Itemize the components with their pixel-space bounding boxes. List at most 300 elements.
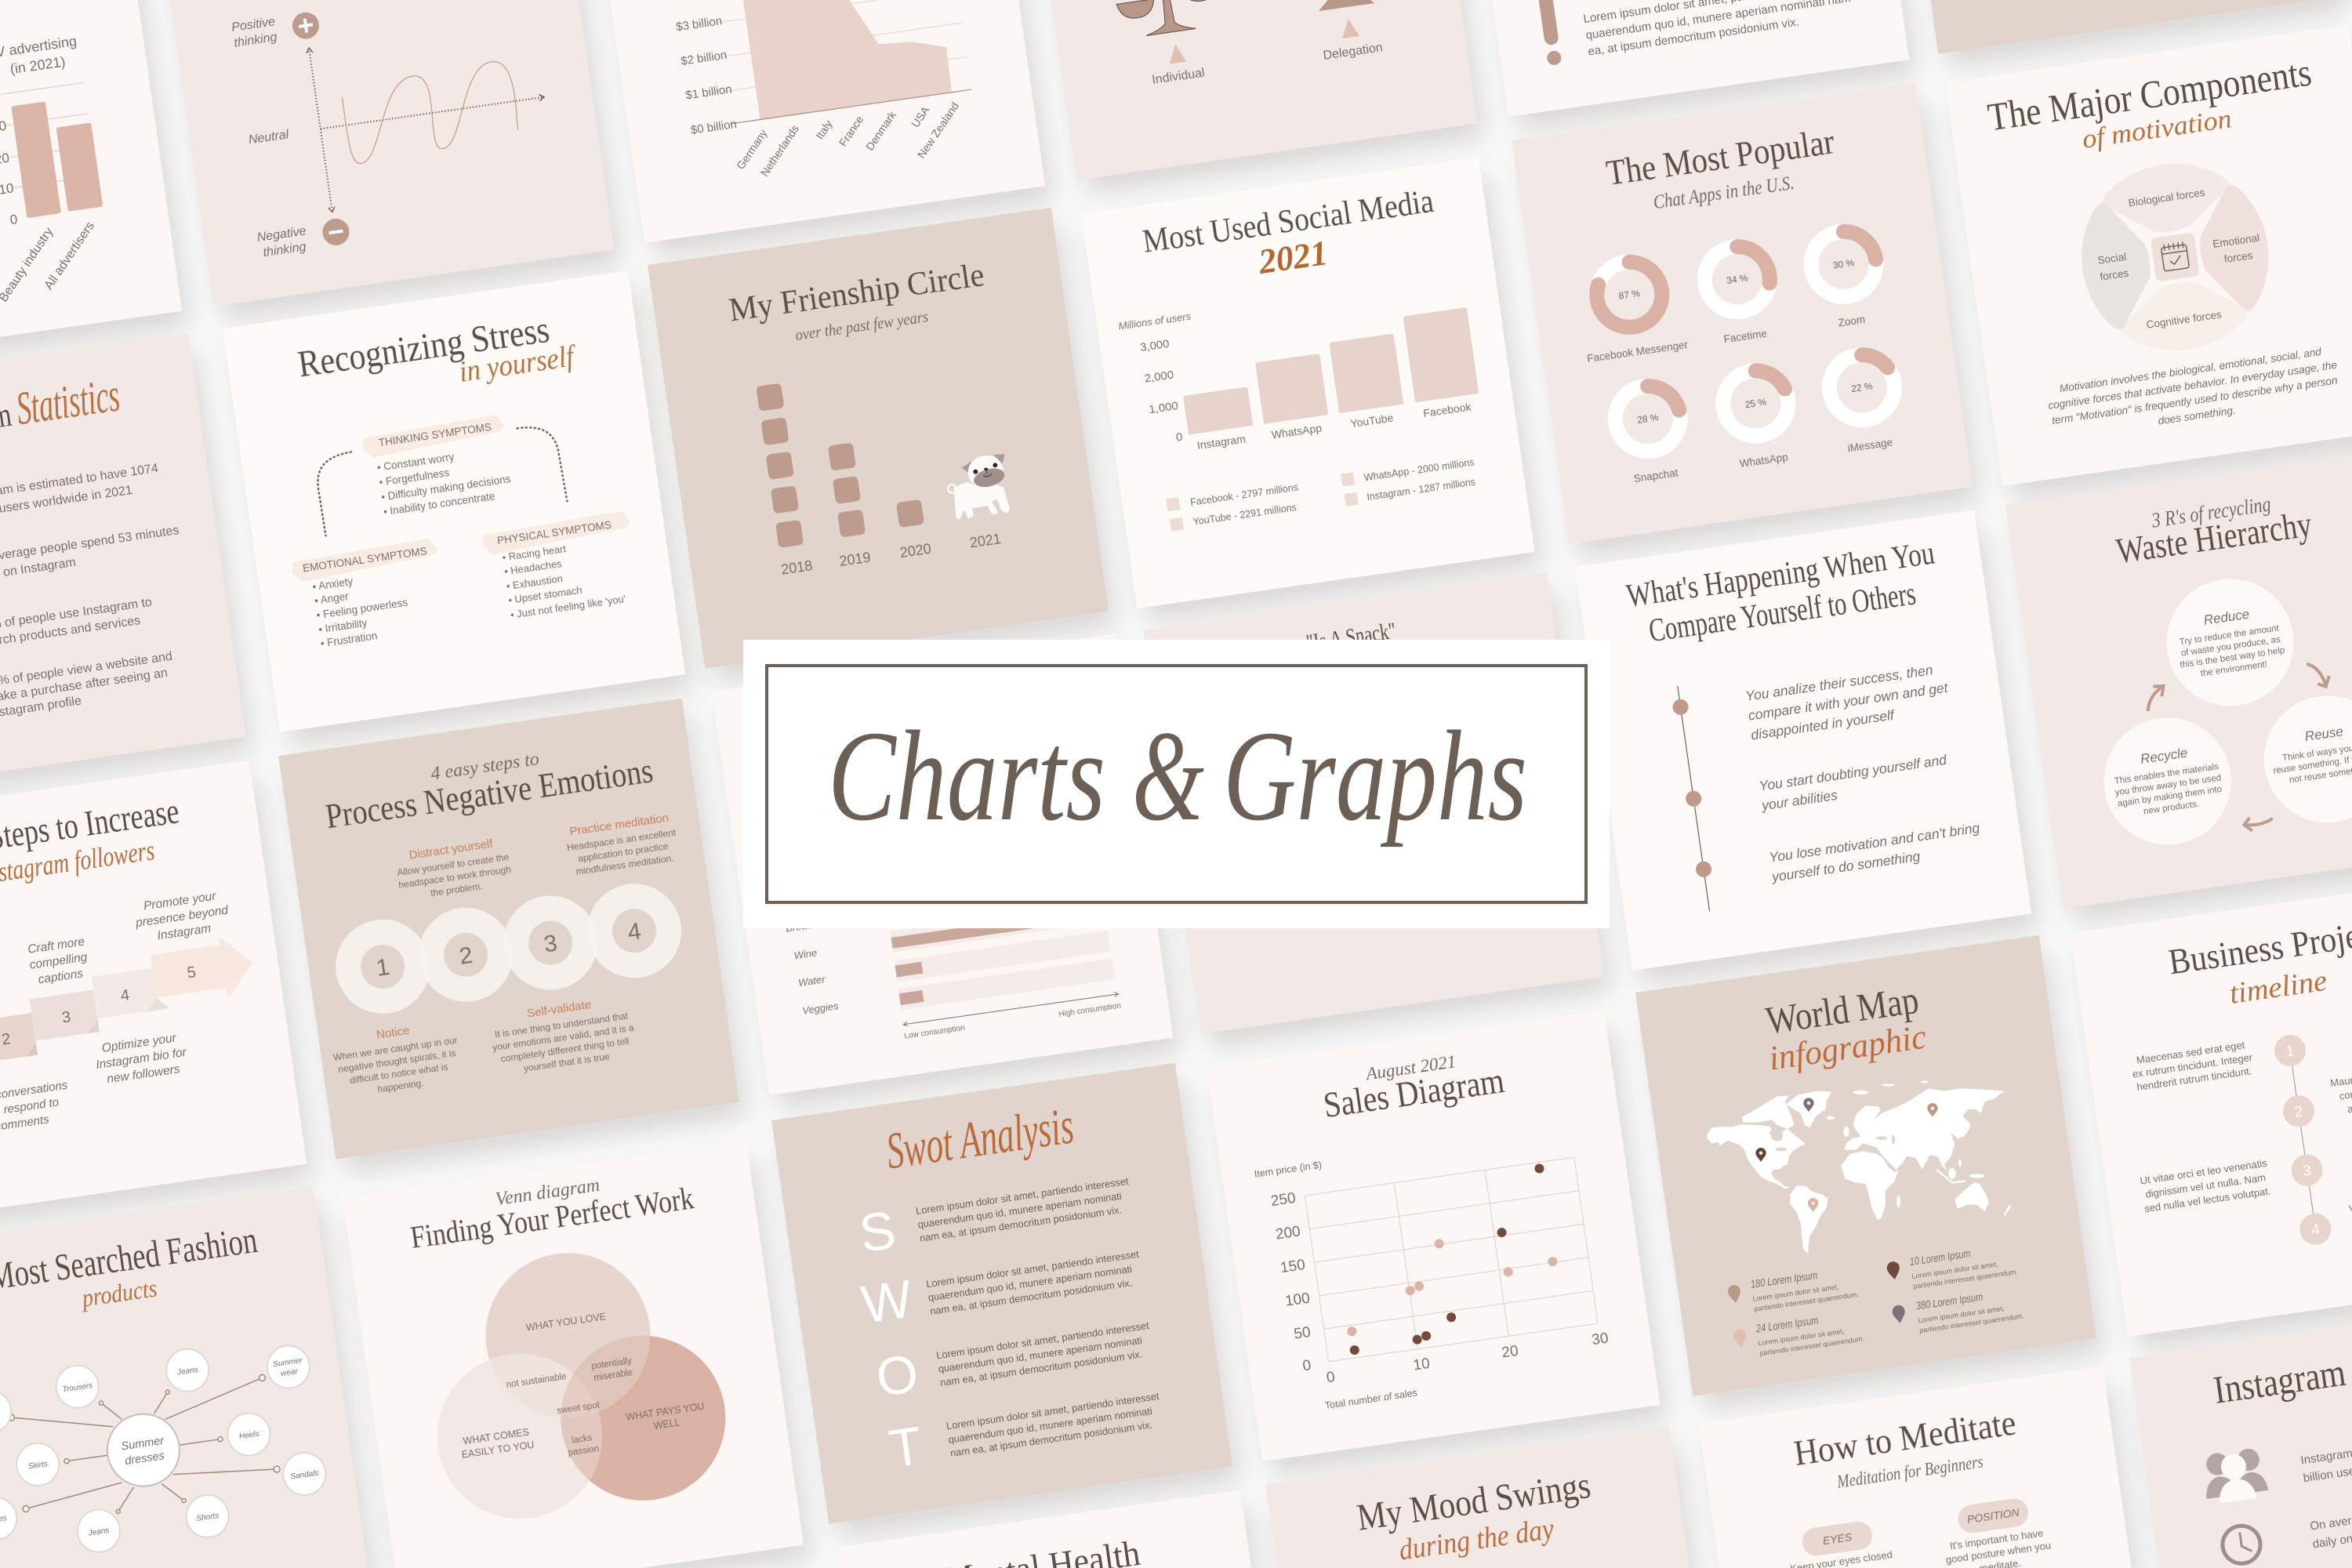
food labels: Water xyxy=(797,973,826,989)
legend: 180: 180 Lorem Ipsum xyxy=(1750,1269,1818,1290)
list: thinking symptoms: • Inability to concentrate xyxy=(383,490,495,517)
paragraph: weaknesses: Lorem ipsum dolor sit amet, partiendo interesset xyxy=(925,1248,1140,1290)
venn labels: WHAT YOU LOVE xyxy=(525,1311,607,1334)
circle: reduce xyxy=(2158,571,2302,714)
statement three: yourself to do something xyxy=(1770,848,1922,885)
y axis values: 200 xyxy=(1275,1223,1301,1243)
heading: Waste Hierarchy xyxy=(2114,504,2314,571)
map pins xyxy=(1755,1098,1938,1212)
step: self-validate: yourself that it is true xyxy=(523,1051,611,1074)
list: physical symptoms: • Just not feeling like 'you' xyxy=(510,593,626,621)
step: distract yourself: headspace to work through xyxy=(397,864,512,891)
text: position: good posture when you xyxy=(1945,1539,2052,1566)
x axis values: 20 xyxy=(1501,1343,1519,1361)
subheading: Venn diagram xyxy=(494,1175,601,1210)
step: self-validate xyxy=(488,993,638,1078)
list: thinking symptoms: • Forgetfulness xyxy=(379,466,450,488)
panel: most searched fashion xyxy=(0,1187,368,1568)
heading: Recognizing Stress xyxy=(296,309,552,386)
mind map satellites: Jeans xyxy=(176,1366,198,1377)
step: distract yourself xyxy=(394,835,514,903)
hub: summer dresses: Summer xyxy=(121,1435,165,1453)
chart label: TV advertising: (in 2021) xyxy=(9,53,67,77)
venn labels: not sustainable xyxy=(506,1372,567,1390)
circle: reuse: Reuse xyxy=(2304,724,2344,744)
label: neutral: Neutral xyxy=(248,128,290,147)
venn labels xyxy=(445,1299,709,1473)
panel: my mood swings xyxy=(1265,1427,1689,1568)
circle: recycle: new products. xyxy=(2143,800,2200,817)
paragraph: opportunities: quaerendum quo id, munere aperiam nominati xyxy=(938,1334,1143,1375)
mind map satellites: Skirts xyxy=(27,1460,49,1471)
icon: users xyxy=(2200,1446,2270,1505)
heading xyxy=(1624,535,1942,652)
panel: my friendship circle xyxy=(648,208,1109,669)
y axis values: 50 xyxy=(1293,1324,1312,1343)
donut: WhatsApp 25% xyxy=(1714,361,1801,471)
food labels: Bread xyxy=(785,919,814,935)
donut: Zoom 30% xyxy=(1802,223,1889,332)
donut: WhatsApp 25%: 25 % xyxy=(1744,397,1767,410)
legend: 24: Lorem ipsum dolor sit amet, xyxy=(1758,1327,1845,1347)
mind map satellites: wear xyxy=(280,1367,299,1378)
list: physical symptoms: • Headaches xyxy=(503,557,563,577)
paragraph: strengths: nam ea, at ipsum democritum posidonium vix. xyxy=(919,1203,1123,1244)
title: Charts xyxy=(828,704,1105,848)
paragraph: weaknesses: quaerendum quo id, munere aperiam nominati xyxy=(927,1263,1133,1304)
paragraph: does something. xyxy=(2158,405,2237,426)
title: & xyxy=(1132,704,1204,848)
x axis labels: New Zealand xyxy=(915,100,961,161)
paragraph: cognitive forces that activate behavior. In everyday usage, the xyxy=(2047,359,2338,412)
pie of forces: forces xyxy=(2099,267,2129,283)
step: practice meditation xyxy=(564,811,681,878)
heading: How to Meditate xyxy=(1791,1402,2018,1473)
heading: The Major Components xyxy=(1985,49,2314,139)
step text: promote: presence beyond xyxy=(134,903,230,930)
paragraph: threats: Lorem ipsum dolor sit amet, partiendo interesset xyxy=(946,1390,1160,1432)
x axis labels: Netherlands xyxy=(758,122,801,179)
legend: 380: Lorem ipsum dolor sit amet, xyxy=(1918,1305,2005,1324)
x axis labels: Italy xyxy=(813,118,835,141)
legend: 10: partiendo interesset quaerendum. xyxy=(1913,1268,2018,1290)
donut: Snapchat 28%: Snapchat xyxy=(1633,466,1679,485)
legend: 10 xyxy=(1886,1240,2018,1294)
hub: summer dresses xyxy=(103,1410,184,1491)
subheading: Chat Apps in the U.S. xyxy=(1652,172,1795,213)
x axis labels: Instagram xyxy=(1196,432,1247,452)
pie of forces: Biological forces xyxy=(2128,187,2206,209)
timeline: 2 xyxy=(2293,1104,2304,1121)
subheading: over the past few years xyxy=(794,307,929,344)
title: Graphs xyxy=(1223,704,1527,848)
panel: exclamation text card xyxy=(1451,0,1909,117)
icon: delegation base xyxy=(1314,0,1374,11)
mind map connectors xyxy=(7,1374,283,1527)
paragraph: opportunities: nam ea, at ipsum democritum posidonium vix. xyxy=(939,1348,1143,1388)
y axis labels: $1 billion xyxy=(685,82,733,102)
paragraph: weaknesses: nam ea, at ipsum democritum posidonium vix. xyxy=(929,1276,1133,1317)
paragraph: Motivation involves the biological, emotional, social, and xyxy=(2059,346,2322,394)
subheading: August 2021 xyxy=(1363,1051,1457,1084)
arrow steps: 3 xyxy=(61,1008,72,1027)
pill: position: POSITION xyxy=(1966,1506,2020,1526)
step: practice meditation: mindfulness meditation. xyxy=(575,852,674,877)
mind map satellites: Sandals xyxy=(290,1469,319,1481)
label: emotional symptoms: EMOTIONAL SYMPTOMS xyxy=(302,545,428,575)
list: physical symptoms: • Racing heart xyxy=(502,543,567,564)
panel: world map infographic xyxy=(1635,935,2096,1396)
icon: clock xyxy=(2220,1523,2263,1566)
label: delegation: Delegation xyxy=(1323,41,1384,63)
pie of forces: forces xyxy=(2223,249,2254,265)
venn labels: WHAT COMES xyxy=(463,1427,530,1446)
axis title: Millions of users xyxy=(1118,310,1192,332)
label: thinking symptoms: THINKING SYMPTOMS xyxy=(378,421,492,448)
circle: reduce: the environment! xyxy=(2200,660,2268,679)
bar chart xyxy=(1176,307,1479,435)
subheading: Meditation for Beginners xyxy=(1835,1452,1984,1492)
step circles: 2 xyxy=(458,942,474,970)
script year: 2021 xyxy=(1255,233,1330,281)
y axis values: 0 xyxy=(1301,1357,1312,1374)
legend: 24 xyxy=(1732,1308,1864,1360)
heading: Process Negative Emotions xyxy=(323,751,655,836)
timeline: 1 xyxy=(2285,1043,2296,1061)
x axis values: 10 xyxy=(1412,1356,1431,1374)
list: physical symptoms: • Upset stomach xyxy=(507,584,583,606)
thinking wave xyxy=(340,59,521,165)
donut: iMessage 22% xyxy=(1820,346,1907,456)
mind map satellites: Trousers xyxy=(62,1381,93,1394)
circle: recycle: you throw away to be used xyxy=(2114,773,2222,797)
bar: all advertisers xyxy=(56,122,103,212)
label: individual: Individual xyxy=(1151,67,1206,87)
year labels: 2019 xyxy=(838,550,872,569)
circle: reduce: this is the best way to help xyxy=(2180,646,2285,670)
list: emotional symptoms: • Anger xyxy=(314,590,350,607)
legend: 380: 380 Lorem Ipsum xyxy=(1915,1290,1984,1312)
label: emotional symptoms xyxy=(290,537,440,583)
y axis values: 0 xyxy=(1175,430,1184,445)
icon: minus xyxy=(321,217,351,247)
consumption axis: Low consumption xyxy=(904,1024,965,1041)
label: negative thinking: Negative xyxy=(256,224,307,245)
donut: WhatsApp 25%: WhatsApp xyxy=(1739,451,1789,470)
paragraph: strengths: Lorem ipsum dolor sit amet, partiendo interesset xyxy=(915,1175,1129,1217)
legend: 180 xyxy=(1726,1263,1859,1316)
step text: optimize: new followers xyxy=(106,1062,181,1086)
circle: recycle: This enables the materials xyxy=(2114,762,2220,786)
label: positive thinking: thinking xyxy=(233,31,278,50)
list: emotional symptoms: • Frustration xyxy=(320,630,378,649)
marker: individual xyxy=(1167,43,1186,64)
timeline xyxy=(2272,1033,2333,1247)
letter T: T xyxy=(886,1415,926,1479)
panel: waste hierarchy xyxy=(2005,448,2352,909)
step: notice: happening. xyxy=(377,1077,424,1094)
list: physical symptoms: • Exhaustion xyxy=(506,572,564,592)
heading: Most Used Social Media xyxy=(1141,183,1436,260)
title xyxy=(828,704,1527,848)
panel: swot analysis xyxy=(771,1063,1232,1524)
label: all advertisers: All advertisers xyxy=(42,220,97,292)
timeline: 3 xyxy=(2302,1163,2313,1180)
step: self-validate: completely different thing to tell xyxy=(500,1036,630,1065)
y axis values: 100 xyxy=(1284,1290,1311,1310)
y axis values: 2,000 xyxy=(1144,368,1174,386)
donut: Snapchat 28% xyxy=(1606,377,1693,487)
script subheading: during the day xyxy=(1397,1512,1556,1567)
venn labels: lacks xyxy=(571,1433,593,1446)
x axis labels: France xyxy=(837,113,866,149)
x axis labels: Denmark xyxy=(863,108,898,153)
x axis labels xyxy=(729,98,968,187)
panel: balance scales xyxy=(1019,0,1477,180)
panel: billion area chart xyxy=(587,0,1045,243)
year labels: 2021 xyxy=(969,531,1002,551)
panel: top right tan card xyxy=(1881,0,2342,54)
legend: 380 xyxy=(1891,1285,2024,1338)
mind map satellites: Jeans xyxy=(87,1526,110,1538)
pill: eyes: EYES xyxy=(1822,1530,1853,1547)
paragraph: threats: nam ea, at ipsum democritum posidonium vix. xyxy=(949,1418,1153,1459)
world map xyxy=(1707,1080,2010,1254)
circle: recycle: again by making them into xyxy=(2117,785,2223,809)
mind map satellites: Summer xyxy=(273,1356,303,1369)
legend: 10: 10 Lorem Ipsum xyxy=(1909,1247,1971,1268)
script heading: Statistics: Statistics xyxy=(13,368,123,434)
x axis labels: Germany xyxy=(734,127,770,172)
step circles: 4 xyxy=(626,918,643,946)
step circles xyxy=(329,877,688,1020)
venn labels: miserable xyxy=(593,1368,633,1383)
pie of forces: Social xyxy=(2097,251,2127,267)
legend: 24: partiendo interesset quaerendum. xyxy=(1759,1334,1864,1357)
hub: summer dresses: dresses xyxy=(124,1450,165,1468)
label: physical symptoms xyxy=(481,510,632,556)
arrows xyxy=(2145,661,2349,843)
panel: steps to increase followers xyxy=(0,760,307,1221)
marker: delegation xyxy=(1340,17,1359,38)
donut: Facetime 34% xyxy=(1696,238,1783,347)
legend: 24: 24 Lorem Ipsum xyxy=(1755,1313,1820,1335)
panel: recognizing stress xyxy=(223,270,685,732)
paragraph: ea, at ipsum democritum posidonium vix. xyxy=(1587,15,1800,59)
timeline xyxy=(1670,685,1717,913)
text: milestone 3: Ut vitae orci et leo venenatis xyxy=(2140,1157,2268,1187)
x axis values: 30 xyxy=(1591,1330,1610,1348)
step text: promote: Instagram xyxy=(157,922,212,942)
panel: how to meditate xyxy=(1699,1367,2131,1568)
pie of forces: Emotional xyxy=(2212,232,2260,250)
pill: position xyxy=(1956,1497,2030,1534)
heading: "Is A Snack" xyxy=(1305,618,1398,656)
panel: sales diagram xyxy=(1207,1011,1660,1461)
statement three: You lose motivation and can't bring xyxy=(1768,820,1980,866)
legend: YouTube - 2291 millions xyxy=(1192,502,1298,528)
arrow steps xyxy=(0,932,261,1064)
heading: My Mood Swings xyxy=(1355,1465,1593,1539)
title card xyxy=(743,640,1610,928)
x axis labels: Facebook xyxy=(1422,400,1472,419)
panel: instagram facts xyxy=(2129,1301,2352,1568)
legend: Instagram - 1287 millions xyxy=(1367,477,1476,503)
step text: optimize: Optimize your xyxy=(101,1031,177,1055)
year labels: 2018 xyxy=(780,557,814,578)
circle: recycle: Recycle xyxy=(2140,746,2188,767)
step: notice: difficult to notice what is xyxy=(349,1062,448,1086)
list: emotional symptoms: • Feeling powerless xyxy=(316,597,408,621)
dotted connectors xyxy=(314,423,567,535)
label: negative thinking: thinking xyxy=(263,240,307,260)
list: thinking symptoms: • Difficulty making decisions xyxy=(380,473,512,503)
scatter points: light xyxy=(1336,1223,1563,1337)
list: emotional symptoms: • Anxiety xyxy=(312,575,354,593)
donut: iMessage 22%: iMessage xyxy=(1847,436,1893,454)
heading: Sales Diagram xyxy=(1321,1060,1507,1125)
step circles: 3 xyxy=(543,930,559,957)
step text: promote: Promote your xyxy=(143,890,217,913)
pie of forces: Cognitive forces xyxy=(2146,308,2223,331)
heading: My Frienship Circle xyxy=(727,257,986,329)
paragraph: strengths: quaerendum quo id, munere aperiam nominati xyxy=(917,1190,1123,1230)
arrow steps: 2 xyxy=(1,1030,12,1049)
step text: captions: compelling xyxy=(29,950,89,972)
pictogram squares xyxy=(756,366,925,548)
subheading: 3 R's of recycling xyxy=(2150,492,2272,532)
heading: The Most Popular xyxy=(1604,121,1837,193)
statement one: You analize their success, then xyxy=(1744,662,1934,704)
text: milestone 3: dignissim vel ut nulla. Nam xyxy=(2145,1171,2267,1200)
x axis labels: YouTube xyxy=(1349,412,1394,430)
panel: food consumption bars xyxy=(712,634,1173,1095)
text: position: It's important to have xyxy=(1949,1527,2044,1552)
legend: 10: Lorem ipsum dolor sit amet, xyxy=(1911,1260,1998,1280)
y axis labels: $2 billion xyxy=(680,49,728,68)
heading: Finding Your Perfect Work xyxy=(408,1180,695,1255)
panel: is a snack xyxy=(1143,573,1604,1034)
illustration: pug xyxy=(948,452,1010,520)
circle: recycle xyxy=(2096,710,2239,853)
x axis labels: WhatsApp xyxy=(1271,422,1323,441)
y axis labels: $0 billion xyxy=(690,118,738,137)
dotted axes xyxy=(306,16,556,212)
statement one: compare it with your own and get xyxy=(1748,680,1950,724)
bar rows xyxy=(890,901,1115,1010)
venn labels: EASILY TO YOU xyxy=(461,1439,535,1461)
donut: Zoom 30%: 30 % xyxy=(1832,257,1855,271)
heading: What's Happening When You xyxy=(1624,535,1936,615)
step: self-validate: your emotions are valid, and it is a xyxy=(492,1022,635,1053)
letter W: W xyxy=(858,1269,916,1335)
icon: plus xyxy=(291,10,321,41)
text: milestone 1: ex rutrum tincidunt. Integer xyxy=(2132,1051,2254,1080)
step: notice: negative thought spirals, it is xyxy=(337,1047,456,1075)
list: emotional symptoms: • Irritability xyxy=(318,617,368,636)
panel: most popular chat apps xyxy=(1512,83,1973,544)
legend: 380: partiendo interesset quaerendum. xyxy=(1919,1312,2024,1334)
step: practice meditation: application to practice xyxy=(577,840,670,864)
step: self-validate: It is one thing to understand that xyxy=(494,1011,629,1040)
statement two: your abilities xyxy=(1760,787,1838,814)
venn labels: WELL xyxy=(653,1417,681,1432)
step: distract yourself: Allow yourself to create the xyxy=(397,851,510,878)
donut: Facebook Messenger 87%: 87 % xyxy=(1618,288,1641,302)
x axis values: 0 xyxy=(1326,1369,1336,1386)
legend xyxy=(1166,456,1478,532)
scatter points: dark xyxy=(1327,1163,1566,1356)
script heading: Swot Analysis xyxy=(883,1097,1077,1180)
letter S: S xyxy=(856,1200,899,1264)
paragraph: term "Motivation" is frequently used to describe why a person xyxy=(2051,374,2338,426)
statement two: You start doubting yourself and xyxy=(1758,752,1947,794)
pie of forces xyxy=(2070,151,2281,363)
script subheading: in yourself xyxy=(457,339,579,389)
mind map satellites: Heels xyxy=(238,1430,260,1441)
panel: mental health xyxy=(837,1490,1251,1568)
venn labels: WHAT PAYS YOU xyxy=(625,1401,705,1423)
arrow steps: 5 xyxy=(186,964,197,982)
step: practice meditation: Headspace is an excellent xyxy=(566,827,677,853)
year labels: 2020 xyxy=(899,541,932,561)
bar: beauty industry xyxy=(11,101,61,218)
y axis labels: $3 billion xyxy=(675,14,723,34)
text: milestone 1: Maecenas sed erat eget xyxy=(2136,1039,2245,1066)
label: thinking symptoms xyxy=(361,414,506,459)
legend: 180: Lorem ipsum dolor sit amet, xyxy=(1752,1283,1839,1303)
y axis values: 1,000 xyxy=(1148,399,1179,416)
panel: business project timeline xyxy=(2071,876,2352,1337)
panel: process negative emotions xyxy=(278,699,739,1160)
statement one: disappointed in yourself xyxy=(1750,706,1896,742)
step: distract yourself: the problem. xyxy=(430,880,483,898)
area chart xyxy=(732,0,953,119)
food labels: Veggies xyxy=(801,1000,840,1017)
letter O: O xyxy=(873,1343,922,1408)
script subheading: products xyxy=(79,1273,158,1312)
panel: Instagram statistics xyxy=(0,333,245,794)
circle: reduce: Reduce xyxy=(2203,607,2250,628)
panel: venn diagram xyxy=(343,1142,804,1568)
circle: reduce: Try to reduce the amount xyxy=(2179,623,2280,647)
food labels: Wine xyxy=(793,947,818,962)
arrow steps: 4 xyxy=(119,986,131,1005)
step circles: 1 xyxy=(375,954,391,982)
pill: eyes xyxy=(1800,1519,1875,1558)
legend: WhatsApp - 2000 millions xyxy=(1363,457,1475,483)
donut: Snapchat 28%: 28 % xyxy=(1636,412,1660,426)
label: positive thinking: Positive xyxy=(230,15,276,34)
axis title: price: Item price (in $) xyxy=(1254,1160,1323,1180)
heading: World Map xyxy=(1763,978,1922,1043)
panel: what's happening xyxy=(1575,510,2031,971)
panel: major components of motivation xyxy=(1945,25,2352,486)
legend: 180: partiendo interesset quaerendum. xyxy=(1754,1290,1859,1313)
label: physical symptoms: PHYSICAL SYMPTOMS xyxy=(496,519,612,546)
icon: scale xyxy=(1116,0,1224,39)
consumption axis: High consumption xyxy=(1058,1002,1122,1019)
panel: positive and negative thinking chart xyxy=(156,0,614,307)
subheading: 4 easy steps to xyxy=(430,749,540,785)
legend: Facebook - 2797 millions xyxy=(1189,482,1299,508)
donut: Zoom 30%: Zoom xyxy=(1838,314,1866,329)
panel: TV advertising bar chart xyxy=(0,0,182,368)
step: notice: Notice xyxy=(376,1024,411,1042)
y axis values: 0 xyxy=(9,212,19,227)
step: notice xyxy=(330,1018,463,1100)
circle: reduce: of waste you produce, as xyxy=(2180,635,2281,659)
